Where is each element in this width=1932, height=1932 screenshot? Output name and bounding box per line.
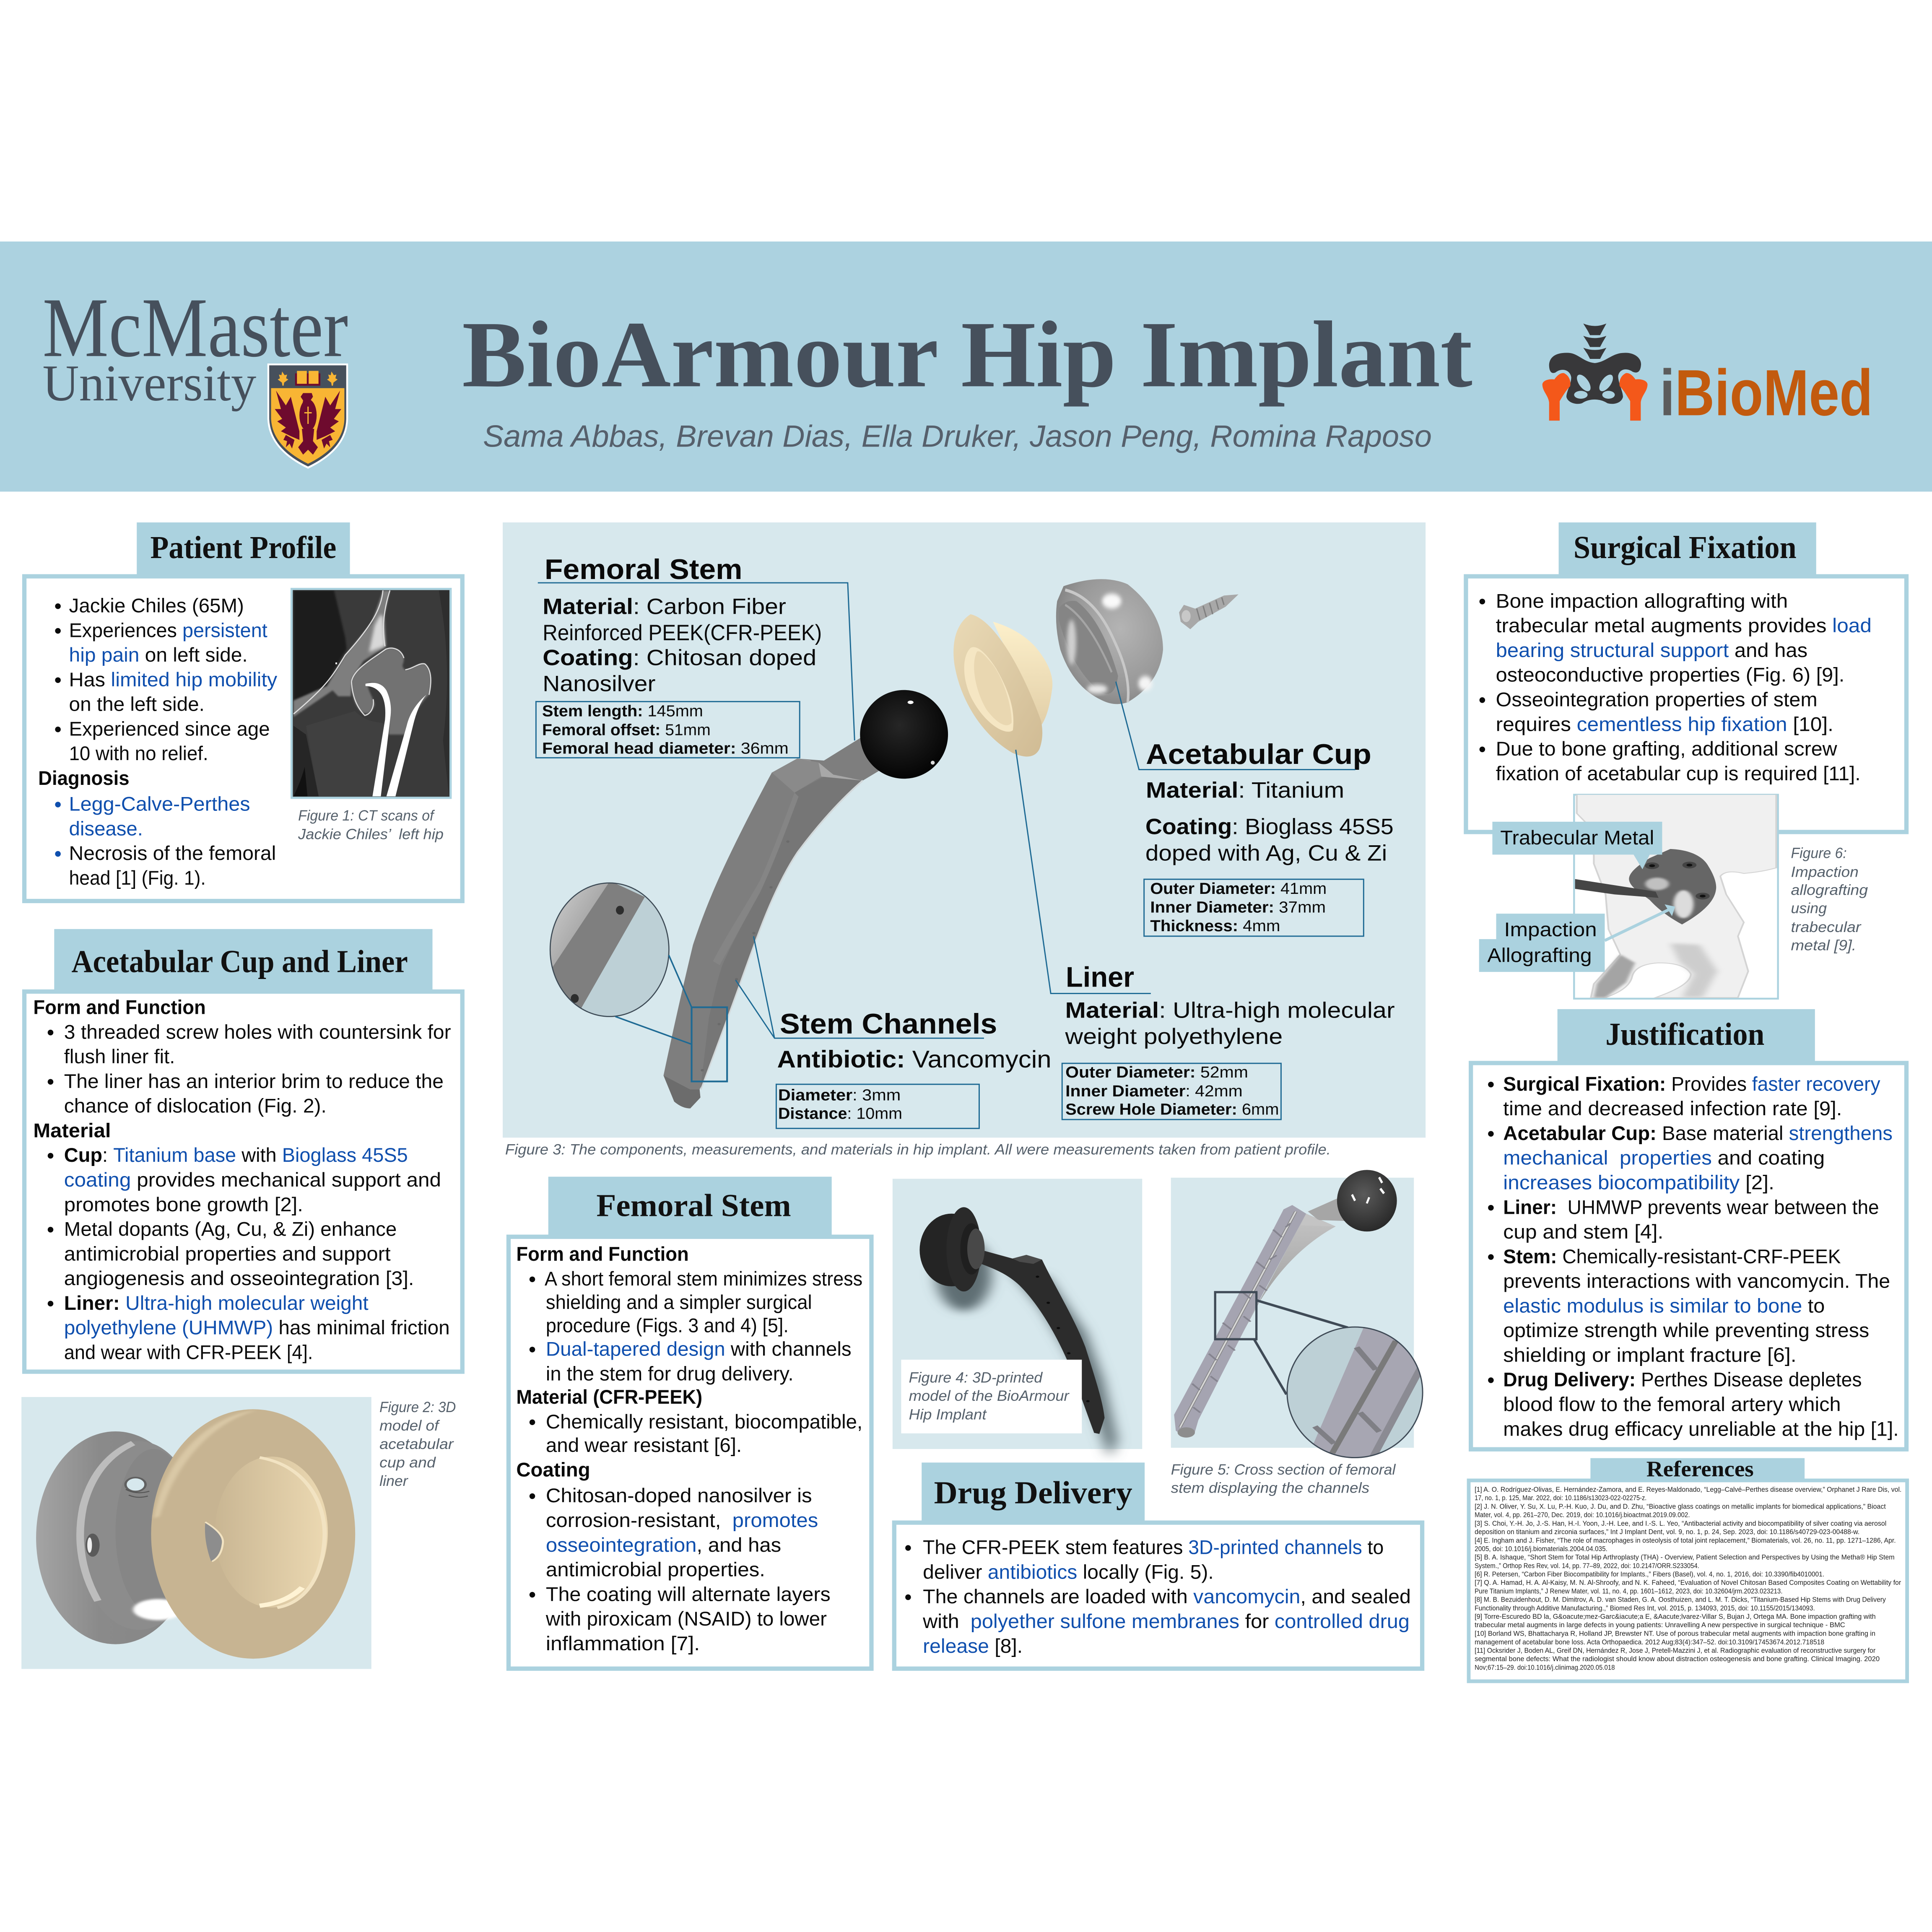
logo: iBioMed [1542,324,1873,429]
text: reference list: [8] M. B. Bezuidenhout, D. M. Dimitrov, A. D. van Staden, G. A. Oosthuizen, and L. M. T. Dicks, “Titanium-Based Hip Stems with Drug Delivery [1475,1596,1886,1604]
femoral head [1337,1170,1397,1231]
label: impaction allografting: Allografting [1487,944,1592,966]
text: surgical fixation: Bone impaction allografting with [1496,589,1788,612]
text: patient details: head [1] (Fig. 1). [69,867,206,889]
text: cup and liner: and wear with CFR-PEEK [4]. [64,1341,313,1363]
measurement box: cup: Inner Diameter: 37mm [1150,898,1326,916]
measurement box: stem: Stem length: 145mm [542,702,703,720]
femoral head [860,690,948,779]
heading tab: Acetabular Cup and Liner [71,944,408,979]
callout: acetabular cup: doped with Ag, Cu & Zi [1145,841,1387,865]
text: patient details: disease. [69,817,143,839]
text: cup and liner: angiogenesis and osseointegration [3]. [64,1267,414,1289]
text: drug delivery: The CFR-PEEK stem features 3D-printed channels to [923,1536,1384,1558]
title: BioArmour Hip Implant [462,301,1472,407]
measurement box: stem [536,701,800,758]
callout: femoral stem: Coating : Chitosan doped [543,645,816,670]
text: femoral stem: in the stem for drug delivery. [546,1362,794,1384]
text: reference list: 2005, doi: 10.1016/j.biomaterials.2004.04.035. [1475,1545,1607,1553]
callout: acetabular cup: Material : Titanium [1146,778,1344,803]
heading tab [1590,1457,1805,1481]
figure 4 caption: Hip Implant [909,1406,987,1423]
callout: femoral stem [536,554,854,758]
figure 4 caption: Figure 4: 3D-printed [909,1369,1043,1386]
text: reference list: Nov;67:15–29. doi:10.1016/j.clinimag.2020.05.018 [1475,1663,1615,1671]
text: surgical fixation: Due to bone grafting, additional screw [1496,737,1838,760]
text: justification: optimize strength while preventing stress [1503,1319,1869,1341]
figure 2: cup and liner render [21,1397,371,1669]
text: surgical fixation: requires cementless hip fixation [10]. [1496,713,1833,735]
figure 4 caption: model of the BioArmour [909,1388,1070,1404]
text: reference list: [5] B. A. Ishaque, “Short Stem for Total Hip Arthroplasty (THA) - Overview, Patient Selection and Perspectives by Using the Metha® Hip Stem [1475,1553,1895,1561]
text: patient details: Jackie Chiles (65M) [69,595,244,617]
callout: femoral stem: Material : Carbon Fiber [543,595,786,619]
text: cup and liner [33,996,451,1363]
text: patient details: Diagnosis [38,767,130,789]
measurement box: cup [1144,879,1363,936]
text: reference list: 17, no. 1, p. 125, Mar. 2022, doi: 10.1186/s13023-022-02275-z. [1475,1494,1646,1502]
measurement box: channels: Diameter : 3mm [778,1086,901,1104]
text: cup and liner: Material [33,1119,111,1141]
callout: liner: weight polyethylene [1065,1024,1283,1049]
callout: liner: Material : Ultra-high molecular [1065,998,1395,1023]
panel: patient profile [24,522,462,901]
heading tab: Justification [1605,1016,1764,1052]
figure 2 caption: model of [379,1418,440,1434]
text: drug delivery: The channels are loaded with vancomycin , and sealed [923,1585,1411,1607]
text: patient details: Legg-Calve-Perthes [69,793,250,815]
measurement box: cup: Thickness: 4mm [1150,917,1280,935]
text: reference list: [1] A. O. Rodríguez-Olivas, E. Hernández-Zamora, and E. Reyes-Maldonado, “Legg–Calvé–Perthes disease overview,” Orphanet J Rare Dis, vol. [1475,1485,1901,1493]
heading tab: References [1646,1457,1754,1481]
text: cup and liner: promotes bone growth [2]. [64,1193,303,1215]
figure 6 caption: metal [9]. [1791,937,1856,953]
liner render [953,614,1052,756]
callout: stem channels: Stem Channels [780,1008,997,1040]
figure 1 caption: Figure 1: CT scans of [298,808,435,824]
text: femoral stem: osseointegration , and has [546,1534,781,1556]
figure 2 caption: cup and [379,1454,436,1471]
text: femoral stem: Form and Function [516,1243,689,1265]
callout: femoral stem: Reinforced PEEK(CFR-PEEK) [543,621,822,645]
text: reference list: deposition on titanium and zirconia surfaces,” Int J Implant Dent, vol. 9, no. 1, p. 24, Sep. 2023, doi: 10.1186/s40729-023-00488-w. [1475,1528,1859,1536]
text: femoral stem: antimicrobial properties. [546,1558,765,1581]
panel: surgical fixation [1466,522,1906,832]
figure 5 caption: stem displaying the channels [1171,1480,1369,1496]
figure 4: 3D-printed model [893,1179,1142,1459]
text: drug delivery: deliver antibiotics locally (Fig. 5). [923,1561,1214,1583]
panel: references [1469,1457,1907,1681]
text: reference list: [9] Torre-Escuredo BD la, G&oacute;mez-Garc&iacute;a E, &Aacute;lvarez-Villar S, Bujan J, Ortega MA. Bone impaction grafting with [1475,1613,1876,1620]
text: femoral stem: Dual-tapered design with channels [546,1338,852,1360]
text: femoral stem: Coating [516,1459,590,1481]
figure 6: impaction allografting [1479,795,1778,999]
text: reference list: [3] S. Choi, Y.-H. Jo, J.-S. Han, H.-I. Yoon, J.-H. Lee, and I.-S. L. Yeo, “Antibacterial activity and biocompatibility of silver coating via aerosol [1475,1519,1886,1527]
zoom box and leader lines [615,955,727,1081]
label: impaction allografting [1479,914,1605,972]
text: surgical fixation: Osseointegration properties of stem [1496,688,1818,711]
text: justification: increases biocompatibility [2]. [1503,1171,1774,1194]
callout: femoral stem: Femoral Stem [545,554,743,585]
text: justification: Stem: Chemically-resistant-CRF-PEEK [1503,1245,1841,1267]
measurement box: liner: Screw Hole Diameter: 6mm [1065,1101,1279,1119]
text: reference list: Functionality through Additive Manufacturing.,” Biomed Res Int, vol. 2015, p. 134093, 2015, doi: 10.1155/2015/134093. [1475,1604,1815,1612]
callout: femoral stem: Nanosilver [543,672,655,696]
figure 3 caption: Figure 3: The components, measurements, and materials in hip implant. All were measurements taken from patient profile. [505,1142,1331,1158]
callout: liner [1016,750,1395,1119]
heading tab [548,1177,832,1236]
text: patient details: Necrosis of the femoral [69,842,276,864]
text: femoral stem: Chitosan-doped nanosilver is [546,1484,812,1506]
zoom box and leader lines [1215,1292,1348,1394]
figure 6 caption: allografting [1791,882,1868,898]
text: reference list: [7] Q. A. Hamad, H. A. Al-Kaisy, M. N. Al-Shroofy, and N. K. Faheed, “Evaluation of Novel Chitosan Based Composites Coating on Wettability for [1475,1579,1901,1587]
text: surgical fixation: bearing structural support and has [1496,639,1807,661]
figure 1: CT scan [292,589,451,798]
measurement box: channels [776,1084,979,1128]
text: justification: time and decreased infection rate [9]. [1503,1097,1842,1119]
panel: femoral stem [509,1177,871,1669]
heading tab: Drug Delivery [934,1475,1132,1510]
text: reference list: trabecular metal augments in large defects in young patients: Unravelling A new perspective in surgical technique - BMC [1475,1621,1845,1629]
measurement box: liner: Inner Diameter : 42mm [1065,1082,1243,1100]
text: reference list [1475,1485,1901,1671]
acetabular cup render [1056,579,1163,704]
text: femoral stem: corrosion-resistant, promotes [546,1509,818,1531]
text: femoral stem: shielding and a simpler surgical [546,1291,812,1313]
text: surgical fixation [1480,589,1872,784]
text: reference list: Pure Titanium Implants,” J Renew Mater, vol. 11, no. 4, pp. 1601–1612, 2023, doi: 10.32604/jrm.2023.023213. [1475,1587,1783,1595]
callout: stem channels [735,936,1052,1128]
text: cup and liner: chance of dislocation (Fig. 2). [64,1095,327,1117]
femoral stem render [664,737,883,1109]
text: reference list: management of acetabular bone loss. Acta Orthopaedica. 2012 Aug;83(4):347–52. doi:10.3109/17453674.2012.718518 [1475,1638,1824,1646]
callout: liner: Liner [1066,961,1134,993]
heading tab [922,1462,1145,1522]
icon: McMaster crest [267,364,348,469]
text: femoral stem: A short femoral stem minimizes stress [545,1267,862,1290]
text: reference list: System.,” Orthop Res Rev, vol. 14, pp. 77–89, 2022, doi: 10.2147/ORR.S233054. [1475,1562,1699,1570]
text: cup and liner: coating provides mechanical support and [64,1169,441,1191]
header band [0,242,1932,492]
label: trabecular metal [1492,822,1662,869]
text: reference list: Mater, vol. 4, pp. 261–270, Dec. 2019, doi: 10.1016/j.bioactmat.2019.09.002. [1475,1511,1690,1519]
text: drug delivery: with polyether sulfone membranes for controlled drug [922,1610,1410,1632]
text: femoral stem: procedure (Figs. 3 and 4) [5]. [546,1314,789,1337]
figure 6 caption: trabecular [1791,919,1862,935]
text: femoral stem: Chemically resistant, biocompatible, [546,1410,862,1433]
measurement box: stem: Femoral head diameter: 36mm [542,740,789,758]
text: justification: Drug Delivery: Perthes Disease depletes [1503,1368,1862,1391]
heading tab [54,929,433,992]
screw render [1179,595,1239,629]
figure 6 caption [1791,845,1868,953]
figure 1 caption: Jackie Chiles’ left hip [298,826,444,842]
label: impaction allografting: Impaction [1504,918,1597,940]
text: cup and liner: Metal dopants (Ag, Cu, & Zi) enhance [64,1218,397,1240]
text: justification: Liner: UHMWP prevents wear between the [1503,1196,1879,1218]
figure 6 caption: Figure 6: [1791,845,1847,862]
figure 2 caption: Figure 2: 3D [379,1399,456,1415]
text: surgical fixation: trabecular metal augments provides load [1496,614,1872,636]
callout: acetabular cup: Coating : Bioglass 45S5 [1145,815,1394,839]
measurement box: channels: Distance : 10mm [778,1104,902,1122]
measurement box: cup: Outer Diameter: 41mm [1150,880,1327,898]
measurement box: liner: Outer Diameter: 52mm [1065,1063,1248,1081]
callout: stem channels: Antibiotic: Vancomycin [777,1046,1052,1073]
text: femoral stem [516,1243,862,1654]
heading tab: Femoral Stem [596,1188,791,1223]
callout: acetabular cup [1116,682,1394,936]
heading tab [1559,522,1816,576]
panel: acetabular cup and liner [24,929,462,1372]
logo: McMaster University: University [42,354,257,412]
text: cup and liner: 3 threaded screw holes with countersink for [64,1021,451,1043]
figure 2 caption: liner [379,1473,408,1489]
arrow to allograft [1605,904,1675,940]
text: cup and liner: polyethylene (UHMWP) has minimal friction [64,1317,450,1339]
figure 2 caption: acetabular [379,1436,454,1452]
figure 5: cross section [1171,1170,1430,1461]
text: reference list: [2] J. N. Oliver, Y. Su, X. Lu, P.-H. Kuo, J. Du, and D. Zhu, “Bioactive glass coatings on metallic implants for biomedical applications,” Bioact [1475,1503,1886,1511]
text: reference list: [6] R. Petersen, “Carbon Fiber Biocompatibility for Implants.,” Fibers (Basel), vol. 4, no. 1, 2016, doi: 10.3390/fib4010001. [1475,1570,1824,1578]
figure 6 caption: using [1791,900,1827,917]
text: surgical fixation: fixation of acetabular cup is required [11]. [1496,762,1861,784]
text: reference list: [10] Borland WS, Bhattacharya R, Holland JP, Brewster NT. Use of porous trabecular metal augments with impaction bone grafting in [1475,1630,1875,1638]
authors: Sama Abbas, Brevan Dias, Ella Druker, Jason Peng, Romina Raposo [483,418,1432,453]
figure 4 caption [901,1360,1082,1433]
measurement box: stem: Femoral offset: 51mm [542,721,711,739]
panel: implant diagram [503,522,1426,1137]
measurement box: liner [1062,1063,1281,1119]
text: justification: prevents interactions with vancomycin. The [1503,1270,1890,1292]
text: femoral stem: with piroxicam (NSAID) to lower [545,1607,827,1630]
text: justification: Surgical Fixation: Provides faster recovery [1503,1072,1880,1095]
text: patient details: on the left side. [69,693,205,715]
magnified stem inset [548,881,669,1021]
text: femoral stem: Material (CFR-PEEK) [516,1386,702,1408]
text: reference list: [4] E. Ingham and J. Fisher, “The role of macrophages in osteolysis of total joint replacement,” Biomaterials, vol. 26, no. 11, pp. 1271–1286, Apr. [1475,1536,1896,1544]
text: patient details: 10 with no relief. [69,742,208,764]
text: drug delivery: release [8]. [923,1635,1023,1657]
text: cup and liner: The liner has an interior brim to reduce the [64,1070,444,1092]
text: patient details [38,595,278,889]
text: patient details: hip pain on left side. [69,644,248,666]
logo: McMaster University [42,280,348,469]
text: patient details: Experienced since age [69,717,270,740]
text: cup and liner: Liner: Ultra-high molecular weight [64,1292,369,1314]
text: justification: makes drug efficacy unreliable at the hip [1]. [1503,1418,1899,1440]
logo: McMaster University: McMaster [42,280,348,374]
icon: pelvis [1542,324,1647,421]
text: justification: mechanical properties and coating [1503,1147,1825,1169]
heading tab: Patient Profile [151,530,336,565]
text: cup and liner: antimicrobial properties and support [64,1242,391,1265]
text: justification: elastic modulus is similar to bone to [1503,1294,1825,1317]
heading tab [137,522,350,576]
callout: acetabular cup: Acetabular Cup [1146,739,1371,770]
text: justification: cup and stem [4]. [1503,1220,1663,1243]
text: cup and liner: Form and Function [33,996,206,1018]
text: reference list: segmental bone defects: What the radiologist should know about distraction osteogenesis and bone grafting. Clinical Imaging. 2020 [1475,1655,1880,1663]
text: patient details: Has limited hip mobility [69,668,278,691]
text: drug delivery [905,1536,1411,1657]
figure 5 caption: Figure 5: Cross section of femoral [1171,1462,1396,1478]
text: justification: Acetabular Cup: Base material strengthens [1503,1122,1893,1144]
text: femoral stem: and wear resistant [6]. [546,1434,742,1456]
figure 5 caption [1171,1462,1396,1496]
figure 2 caption [379,1399,456,1489]
panel: drug delivery [894,1462,1422,1669]
text: justification: shielding or implant fracture [6]. [1503,1344,1797,1366]
wordmark: iBioMed [1660,356,1873,429]
text: femoral stem: inflammation [7]. [546,1632,700,1654]
heading tab [1558,1009,1815,1063]
text: patient details: Experiences persistent [69,619,267,641]
text: reference list: [11] Ocksrider J, Boden AL, Greif DN, Hernández R, Jose J, Pretell-Mazzini J, et al. Radiographic evaluation of reconstructive surgery for [1475,1646,1875,1654]
panel: justification [1471,1009,1906,1449]
text: surgical fixation: osteoconductive properties (Fig. 6) [9]. [1496,664,1844,686]
label: trabecular metal: Trabecular Metal [1500,826,1654,849]
figure 1 caption [298,808,444,842]
heading tab: Surgical Fixation [1574,530,1797,565]
text: femoral stem: The coating will alternate layers [546,1583,831,1605]
text: cup and liner: flush liner fit. [64,1045,175,1067]
text: justification: blood flow to the femoral artery which [1503,1393,1841,1415]
text: cup and liner: Cup: Titanium base with Bioglass 45S5 [64,1144,408,1166]
figure 6 caption: Impaction [1791,864,1859,880]
magnified channels inset [1287,1324,1430,1461]
text: justification [1488,1072,1899,1440]
